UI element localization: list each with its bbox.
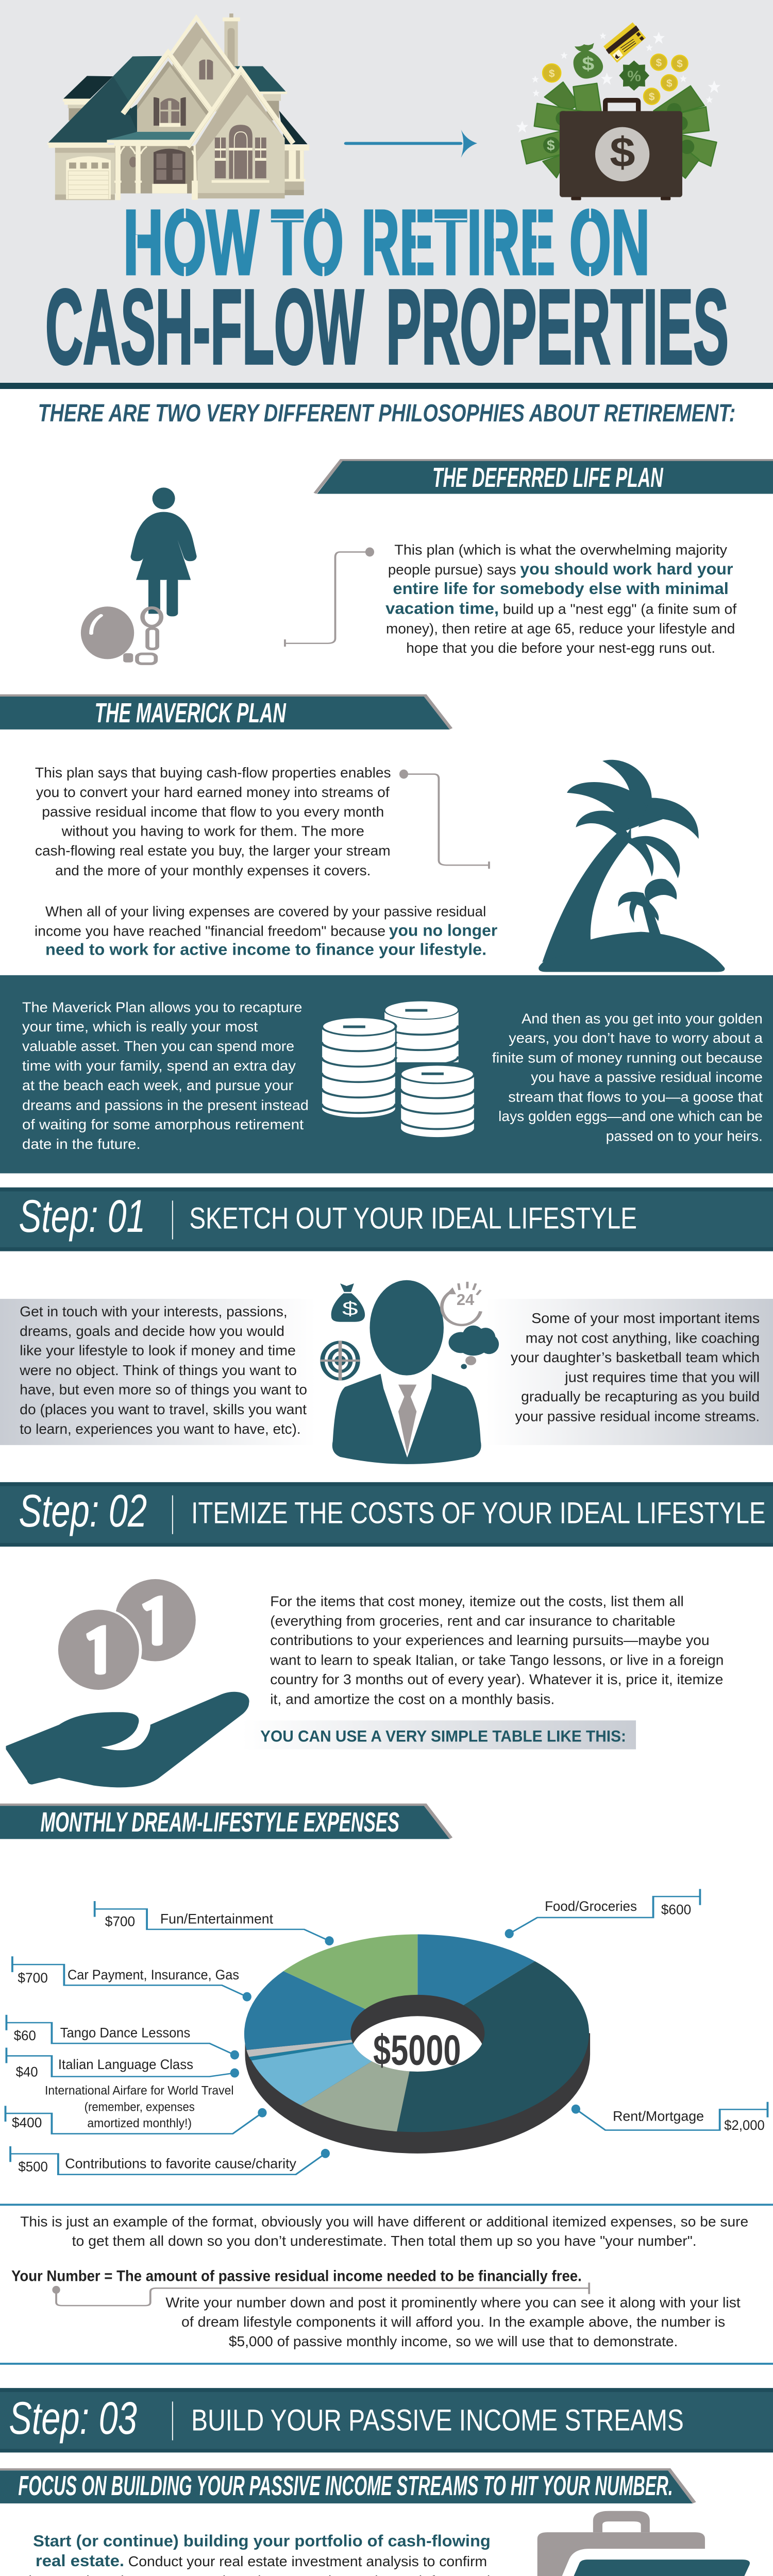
chart: expenses donut xyxy=(244,1934,590,2154)
banner: deferred life plan xyxy=(313,459,773,494)
icon: briefcase with money: $ xyxy=(649,91,655,103)
text: golden years xyxy=(492,1011,763,1144)
section: step 03 xyxy=(0,2388,773,2576)
step bar 02 xyxy=(0,1482,773,1547)
panel: deferred life plan xyxy=(81,459,773,664)
title: HOW xyxy=(123,191,259,294)
panel: interests: do (places you want to travel, skills you want xyxy=(20,1401,307,1417)
panel: interests: have, but even more so of things you want to xyxy=(20,1382,307,1398)
panel: interests: Get in touch with your interests, passions, xyxy=(20,1303,288,1319)
text: deferred life plan xyxy=(385,541,736,656)
icon: businessman thinking xyxy=(321,1280,499,1464)
step bar 03 xyxy=(0,2388,773,2452)
label: international airfare: $400 xyxy=(12,2115,42,2130)
text: recapture your time: valuable asset. Then you can spend more xyxy=(22,1038,294,1054)
connector xyxy=(404,774,489,869)
title: ON xyxy=(569,191,650,294)
text: maverick plan: passive residual income that flow to you every month xyxy=(42,804,384,820)
arrow xyxy=(344,129,477,158)
label: fun/entertainment: $700 xyxy=(105,1914,135,1929)
text: build your portfolio: Conduct your real estate investment analysis to confirm xyxy=(128,2553,487,2569)
label: italian class: Italian Language Class xyxy=(58,2057,193,2072)
panel: interests xyxy=(0,1299,315,1445)
banner: monthly expenses xyxy=(0,1804,452,1839)
text: itemize the costs xyxy=(270,1593,724,1707)
icon: briefcase with money: $ xyxy=(677,58,683,70)
text: maverick plan xyxy=(35,765,497,958)
text: recapture your time: of waiting for some amorphous retirement xyxy=(22,1116,304,1132)
label: international airfare: (remember, expenses xyxy=(85,2100,195,2114)
label: international airfare: International Airfare for World Travel xyxy=(45,2083,233,2097)
label: food/groceries: Food/Groceries xyxy=(545,1899,637,1914)
connector dot xyxy=(365,548,374,556)
label: contributions: Contributions to favorite cause/charity xyxy=(65,2156,296,2172)
icon: briefcase with money: $ xyxy=(610,129,635,176)
step bar 01 xyxy=(0,1188,773,1251)
label: car payment xyxy=(12,1956,251,2002)
label: car payment: Car Payment, Insurance, Gas xyxy=(68,1967,239,1982)
title: TO xyxy=(271,191,344,294)
text: build your portfolio: Start (or continue) building your portfolio of cash-flowing xyxy=(33,2532,491,2550)
label: food/groceries xyxy=(505,1889,700,1938)
icon: money bag: $ xyxy=(342,1298,358,1319)
label: car payment: $700 xyxy=(18,1971,48,1986)
text: deferred life plan: people pursue) says xyxy=(388,562,516,578)
icon: clock 24: 24 xyxy=(457,1291,475,1309)
section: step 01 xyxy=(0,1188,773,1464)
text: maverick plan: When all of your living expenses are covered by your passive residual xyxy=(45,904,486,920)
label: food/groceries: $600 xyxy=(661,1902,691,1918)
text: maverick plan: need to work for active income to finance your lifestyle. xyxy=(45,940,486,958)
text: maverick plan: without you having to work for them. The more xyxy=(61,823,364,839)
panel: your number xyxy=(0,2204,773,2365)
icon: palm tree island xyxy=(539,760,725,972)
icon: target xyxy=(321,1341,360,1380)
panel: maverick plan xyxy=(0,694,773,1173)
icon: clock 24 xyxy=(442,1282,481,1325)
panel: interests: like your lifestyle to look if money and time xyxy=(20,1343,296,1359)
step bar 03: Step: 03 xyxy=(9,2393,137,2444)
text: deferred life plan: vacation time, xyxy=(385,599,499,617)
text: maverick plan: This plan says that buying cash-flow properties enables xyxy=(35,765,391,781)
title xyxy=(45,191,729,386)
label: contributions xyxy=(10,2146,330,2175)
label: tango lessons xyxy=(6,2015,239,2059)
label: tango lessons: Tango Dance Lessons xyxy=(60,2025,190,2041)
banner: maverick plan: THE MAVERICK PLAN xyxy=(95,698,287,728)
icon: coin stacks xyxy=(322,1001,475,1138)
text: maverick plan: you to convert your hard earned money into streams of xyxy=(36,784,390,800)
panel: free items xyxy=(485,1299,773,1445)
section: header xyxy=(0,0,773,427)
panel: two benefits xyxy=(0,975,773,1173)
icon: briefcase with money: $ xyxy=(666,77,673,89)
label: italian class: $40 xyxy=(16,2064,38,2080)
label: rent/mortgage xyxy=(572,2102,767,2133)
banner: maverick plan xyxy=(0,694,452,730)
section: step 02 xyxy=(0,1482,773,2365)
text: maverick plan: and the more of your monthly expenses it covers. xyxy=(55,862,371,878)
text: build your portfolio: real estate. xyxy=(36,2551,124,2570)
connector dot xyxy=(399,770,408,778)
text: recapture your time: at the beach each week, and pursue your xyxy=(22,1077,293,1093)
text: recapture your time: your time, which is really your most xyxy=(22,1019,258,1035)
panel: interests: were no object. Think of things you want to xyxy=(19,1362,297,1378)
label: international airfare xyxy=(6,2083,267,2134)
icon: briefcase with money: % xyxy=(627,68,641,84)
label: rent/mortgage: Rent/Mortgage xyxy=(613,2109,704,2124)
label: italian class xyxy=(6,2047,239,2080)
icon: hand with coins xyxy=(6,1579,249,1787)
text: recapture your time: time with your family, spend an extra day xyxy=(22,1058,296,1074)
label: fun/entertainment: Fun/Entertainment xyxy=(160,1911,273,1927)
icon: person with ball and chain xyxy=(81,487,197,664)
label: contributions: $500 xyxy=(18,2159,48,2175)
icon: briefcase with money: $ xyxy=(582,53,594,74)
icon: briefcase with money: $ xyxy=(549,67,555,79)
text: maverick plan: you no longer xyxy=(389,921,497,939)
connector xyxy=(285,552,369,647)
label: international airfare: amortized monthly!) xyxy=(87,2116,192,2130)
panel: interests: to learn, experiences you want to have, etc). xyxy=(20,1421,301,1437)
icon: house xyxy=(47,13,309,200)
text: maverick plan: income you have reached "financial freedom" because xyxy=(35,923,385,939)
icon: briefcase with money xyxy=(516,22,720,200)
label: tango lessons: $60 xyxy=(14,2028,36,2043)
chart: expenses donut: $5000 xyxy=(373,2026,461,2074)
text: recapture your time: dreams and passions in the present instead xyxy=(22,1097,309,1113)
icon: money bag xyxy=(331,1283,365,1322)
text: recapture your time: date in the future. xyxy=(22,1136,141,1153)
icon: thought cloud xyxy=(449,1326,499,1369)
icon: briefcase with money: $ xyxy=(656,57,662,69)
text: recapture your time: The Maverick Plan allows you to recapture xyxy=(22,999,302,1015)
text: itemize the costs: it, and amortize the cost on a monthly basis. xyxy=(270,1691,554,1707)
step bar 02: Step: 02 xyxy=(19,1485,147,1537)
panel: interests: dreams, goals and decide how you would xyxy=(20,1323,284,1339)
text: build your portfolio xyxy=(28,2532,495,2576)
label: fun/entertainment xyxy=(95,1901,334,1945)
icon: briefcase with money: $ xyxy=(547,138,555,154)
icon: briefcase folder xyxy=(537,2511,750,2576)
step bar 01: Step: 01 xyxy=(19,1191,145,1242)
text: recapture your time xyxy=(22,999,309,1153)
callout: simple table xyxy=(242,1720,636,1749)
text: maverick plan: cash-flowing real estate you buy, the larger your stream xyxy=(35,843,391,859)
